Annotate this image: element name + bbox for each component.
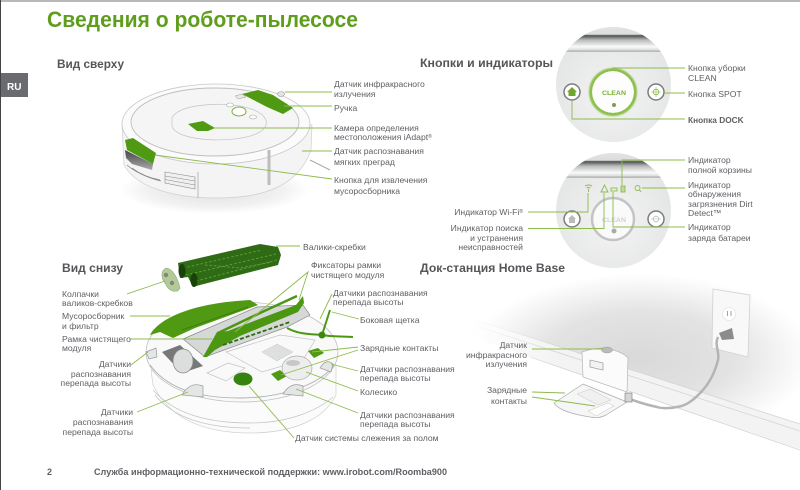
bin and filter	[150, 300, 258, 338]
callouts: home base: Зарядные	[487, 385, 527, 395]
callouts: indicators: заряда батареи	[688, 233, 751, 243]
dimmed CLEAN button: CLEAN	[602, 217, 626, 224]
callouts: indicators: Индикатор	[688, 180, 731, 190]
callouts: top view	[155, 79, 432, 196]
baseboard	[470, 318, 800, 449]
contacts	[308, 348, 324, 358]
illustration: brush caps	[162, 268, 180, 291]
power cord	[630, 337, 718, 408]
callouts: indicators: Индикатор Wi-Fi	[454, 207, 519, 217]
dock	[554, 347, 632, 418]
callouts: bottom view: Колесико	[360, 387, 397, 397]
callouts: indicators: загрязнения Dirt	[688, 199, 753, 209]
callouts: bottom view: чистящего модуля	[311, 270, 385, 280]
callouts: indicators: неисправностей	[458, 242, 523, 252]
SPOT button	[648, 84, 664, 100]
callouts: bottom view: Рамка чистящего	[62, 334, 131, 344]
callouts: top view: местоположения iAdapt	[334, 132, 428, 142]
callouts: bottom view: Зарядные контакты	[360, 343, 438, 353]
callouts: top view: Датчик распознавания	[334, 146, 424, 156]
callouts: bottom view: перепада высоты	[63, 427, 133, 437]
highlighted bin release	[125, 138, 156, 164]
callouts: top view: излучения	[334, 89, 376, 99]
callouts: buttons: Кнопка уборки	[688, 63, 746, 73]
wall outlet	[712, 289, 750, 357]
callouts: indicators: Индикатор	[688, 222, 731, 232]
status icons	[585, 185, 641, 192]
callouts: home base: Датчик	[500, 340, 527, 350]
callouts: bottom view: распознавания	[71, 369, 131, 379]
callouts: buttons	[572, 63, 746, 125]
callouts: buttons: Кнопка SPOT	[688, 89, 742, 99]
callouts: indicators	[451, 155, 753, 252]
callouts: home base: излучения	[486, 359, 527, 369]
illustration: robot bottom view	[146, 296, 353, 433]
callouts: bottom view: Датчик системы слежения за полом	[295, 433, 439, 443]
callouts: indicators: обнаружения	[688, 189, 741, 199]
footer: support link: Служба информационно-технической поддержки: www.irobot.com/Roomba900	[94, 467, 447, 477]
callouts: top view: Датчик инфракрасного	[334, 79, 425, 89]
callouts: top view: Ручка	[334, 103, 357, 113]
callouts: bottom view: Датчики распознавания	[333, 288, 428, 298]
callouts: bottom view: Датчики	[101, 407, 133, 417]
title: Сведения о роботе-пылесосе	[47, 7, 358, 32]
callouts: bottom view: Датчики распознавания	[360, 364, 455, 374]
callouts: bottom view: перепада высоты	[61, 378, 131, 388]
panel: indicators close-up	[556, 153, 671, 268]
callouts: bottom view: Колпачки	[62, 289, 99, 299]
callouts: bottom view: Фиксаторы рамки	[311, 260, 381, 270]
illustration: home base on wall	[460, 274, 800, 450]
callouts: bottom view: модуля	[62, 343, 92, 353]
callouts: top view: Кнопка для извлечения	[334, 175, 428, 185]
caster	[282, 356, 312, 380]
control buttons	[226, 103, 256, 119]
callouts: home base	[466, 340, 603, 406]
callouts: bottom view: перепада высоты	[333, 297, 403, 307]
CLEAN button: CLEAN	[602, 90, 626, 97]
DOCK button	[564, 84, 580, 100]
highlighted handle	[242, 90, 293, 114]
callouts: indicators: и устранения	[470, 233, 523, 243]
language tab	[1, 73, 28, 97]
footer: page number: 2	[47, 467, 52, 477]
callouts: indicators: ®	[519, 208, 523, 215]
callouts: bottom view: Датчики	[99, 359, 131, 369]
panel: buttons close-up	[556, 27, 671, 142]
callouts: bottom view	[61, 242, 455, 443]
callouts: bottom view: перепада высоты	[360, 419, 430, 429]
heading: home base: Док-станция Home Base	[420, 261, 565, 275]
callouts: indicators: Индикатор поиска	[451, 223, 523, 233]
cleaning head cavity	[183, 305, 310, 357]
callouts: bottom view: перепада высоты	[360, 373, 430, 383]
heading: bottom view: Вид снизу	[62, 261, 123, 275]
callouts: bottom view: Датчики распознавания	[360, 410, 455, 420]
illustration: robot top view	[120, 84, 330, 214]
callouts: buttons: Кнопка DOCK	[688, 115, 744, 125]
callouts: top view: ®	[428, 133, 432, 140]
callouts: indicators: Detect™	[688, 208, 721, 218]
highlighted camera	[188, 121, 215, 131]
callouts: bottom view: распознавания	[73, 417, 133, 427]
callouts: top view: мусоросборника	[334, 186, 400, 196]
callouts: indicators: Индикатор	[688, 155, 731, 165]
dark recess	[125, 150, 153, 170]
language tab: RU	[7, 82, 21, 93]
callouts: bottom view: Мусоросборник	[62, 311, 125, 321]
callouts: home base: контакты	[491, 396, 527, 406]
callouts: bottom view: валиков-скребков	[62, 298, 133, 308]
wall shading	[460, 274, 800, 424]
callouts: indicators: полной корзины	[688, 165, 752, 175]
wheel bay	[162, 345, 203, 373]
callouts: bottom view: Валики-скребки	[303, 242, 366, 252]
callouts: bottom view: Боковая щетка	[360, 315, 420, 325]
callouts: home base: инфракрасного	[466, 350, 527, 360]
side brush	[287, 310, 353, 337]
callouts: top view: Камера определения	[334, 123, 419, 133]
illustration: brush rolls	[178, 244, 281, 287]
cliff sensors	[146, 348, 333, 397]
callouts: buttons: CLEAN	[688, 73, 717, 83]
dimmed side buttons	[564, 211, 664, 227]
plate details	[226, 335, 315, 372]
heading: top view: Вид сверху	[57, 57, 124, 71]
callouts: bottom view: и фильтр	[62, 321, 99, 331]
heading: buttons and indicators: Кнопки и индикаторы	[420, 56, 553, 70]
cleaning frame	[203, 296, 304, 357]
callouts: top view: мягких преград	[334, 157, 395, 167]
floor tracking sensor	[234, 372, 252, 386]
